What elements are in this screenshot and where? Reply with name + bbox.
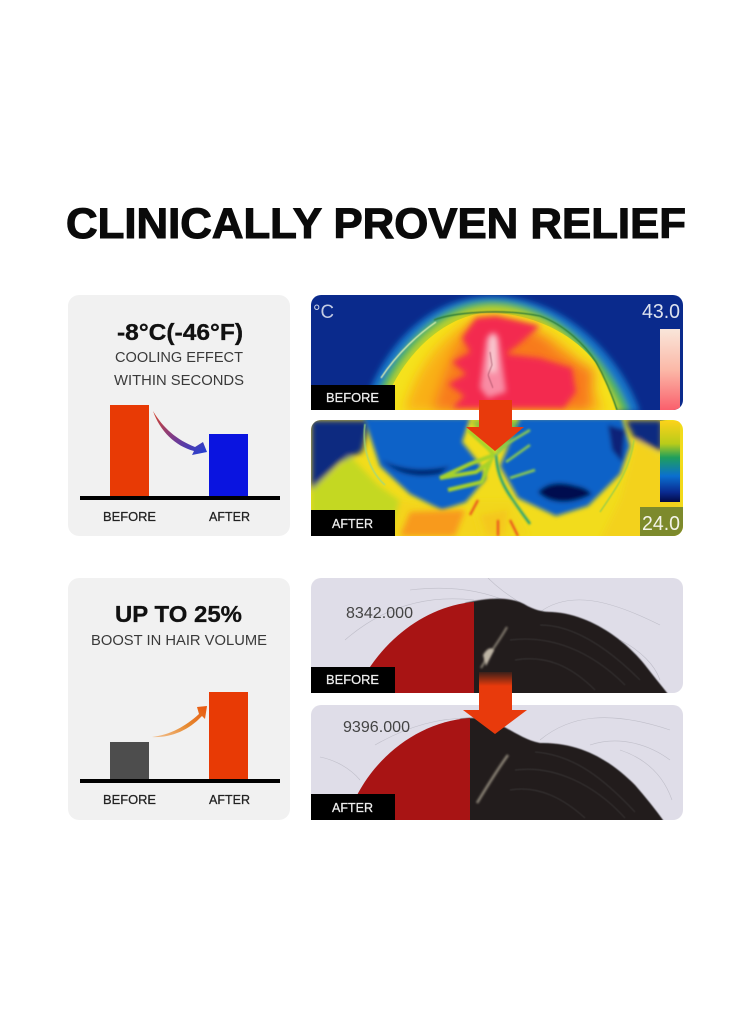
panel: hair volume card xyxy=(68,578,290,820)
label: degrees celsius: °C xyxy=(313,302,334,323)
badge: after xyxy=(311,510,395,536)
hair: dark natural area xyxy=(464,598,668,693)
heading: volume boost: UP TO 25% xyxy=(115,601,242,627)
panel: cooling effect card xyxy=(68,295,290,536)
panel: hair image after xyxy=(311,705,683,830)
badge: after xyxy=(311,794,395,820)
bar chart: temperature before and after: BEFORE xyxy=(103,510,156,524)
legend: hot temperature scale xyxy=(660,329,680,410)
legend: cold temperature scale xyxy=(660,421,680,502)
panel: hair image before xyxy=(311,578,683,703)
text: cooling effect description: COOLING EFFECT xyxy=(115,350,243,366)
arrow: curved upward from before to after xyxy=(152,706,207,737)
panel: thermal image before xyxy=(311,295,683,412)
arrow: hair before to after xyxy=(463,672,527,734)
text: volume description: BOOST IN HAIR VOLUME xyxy=(91,633,267,649)
badge: before xyxy=(311,667,395,693)
value: after volume count: 9396.000 xyxy=(343,719,410,736)
badge: before: BEFORE xyxy=(326,673,379,687)
value background: min temperature xyxy=(640,507,683,536)
text: cooling effect description xyxy=(114,350,244,389)
badge: before: BEFORE xyxy=(326,391,379,405)
bar chart: hair volume before and after xyxy=(80,692,280,807)
text: cooling effect description: WITHIN SECONDS xyxy=(114,373,244,389)
bar chart: temperature before and after: AFTER xyxy=(209,510,250,524)
hair: red highlighted area xyxy=(358,718,470,820)
hair part: scalp line xyxy=(477,755,508,803)
bar chart: temperature before and after xyxy=(80,405,280,524)
hair part: scalp line xyxy=(481,627,507,668)
badge: before xyxy=(311,385,395,410)
panel: thermal image after xyxy=(311,418,683,540)
hair: red highlighted area xyxy=(370,602,474,693)
bar chart: hair volume before and after: BEFORE xyxy=(103,793,156,807)
bar chart: hair volume before and after: AFTER xyxy=(209,793,250,807)
heading: temperature drop: -8°C(-46°F) xyxy=(117,319,243,345)
arrow: thermal before to after xyxy=(466,400,524,451)
hair: dark natural area xyxy=(460,717,664,820)
badge: after: AFTER xyxy=(332,801,373,815)
value: min temperature: 24.0 xyxy=(642,513,680,535)
arrow: curved downward from before to after xyxy=(153,411,207,455)
badge: after: AFTER xyxy=(332,517,373,531)
title: CLINICALLY PROVEN RELIEF xyxy=(66,200,686,248)
value: max temperature: 43.0 xyxy=(642,301,680,323)
value: before volume count: 8342.000 xyxy=(346,605,413,622)
